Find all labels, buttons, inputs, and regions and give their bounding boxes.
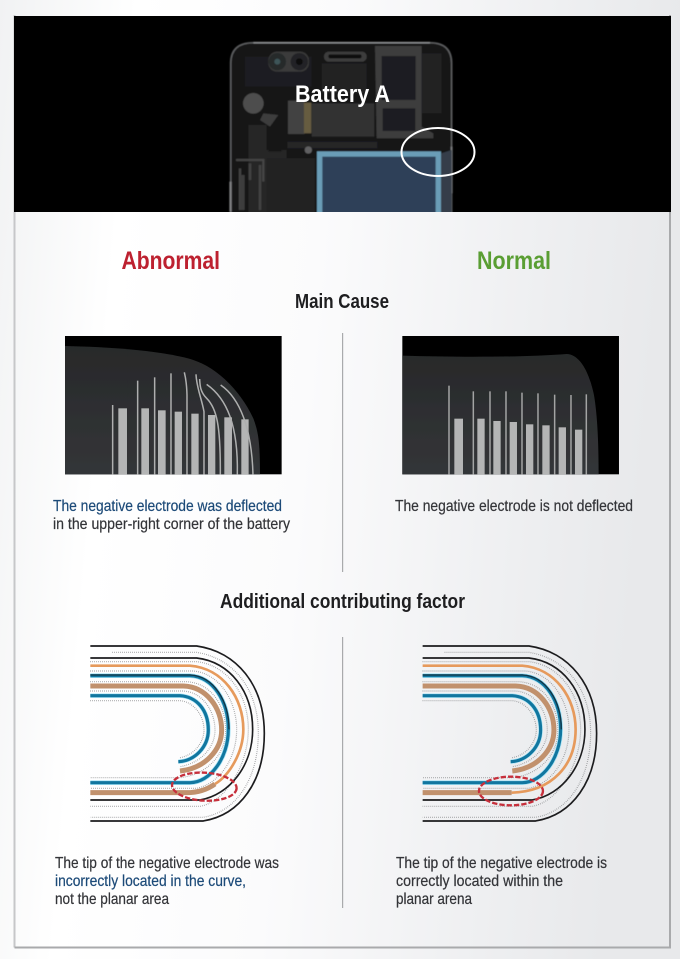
text: normal main cause: The negative electrode is not deflected xyxy=(395,498,633,515)
callout: white ellipse xyxy=(402,128,474,176)
image: normal electrodes xyxy=(402,336,619,474)
text: normal contributing factor: correctly located within the xyxy=(396,873,563,890)
heading: Main Cause: Main Cause xyxy=(295,290,389,313)
image: phone internals xyxy=(229,43,453,217)
heading: Normal: Normal xyxy=(477,247,551,275)
text: abnormal main cause xyxy=(53,498,290,533)
text: normal contributing factor: planar arena xyxy=(396,891,472,908)
panel: phone internals header xyxy=(14,16,671,217)
text: abnormal main cause: in the upper-right corner of the battery xyxy=(53,516,290,533)
callout: red dashed ellipse xyxy=(479,777,543,805)
heading: Battery A: Battery A xyxy=(295,81,390,108)
text: abnormal contributing factor: not the planar area xyxy=(55,891,169,908)
heading: Abnormal: Abnormal xyxy=(122,247,220,275)
diagram: abnormal electrode winding xyxy=(90,646,264,821)
text: abnormal main cause: The negative electrode was deflected xyxy=(53,498,282,515)
text: abnormal contributing factor: incorrectly located in the curve, xyxy=(55,873,246,890)
text: normal contributing factor xyxy=(396,855,607,908)
heading: Additional contributing factor: Additional contributing factor xyxy=(220,590,465,613)
text: abnormal contributing factor xyxy=(55,855,279,908)
diagram: normal electrode winding xyxy=(423,646,597,821)
callout: red dashed ellipse xyxy=(171,771,237,802)
text: normal contributing factor: The tip of the negative electrode is xyxy=(396,855,607,872)
text: abnormal contributing factor: The tip of the negative electrode was xyxy=(55,855,279,872)
image: abnormal electrodes xyxy=(65,336,282,474)
